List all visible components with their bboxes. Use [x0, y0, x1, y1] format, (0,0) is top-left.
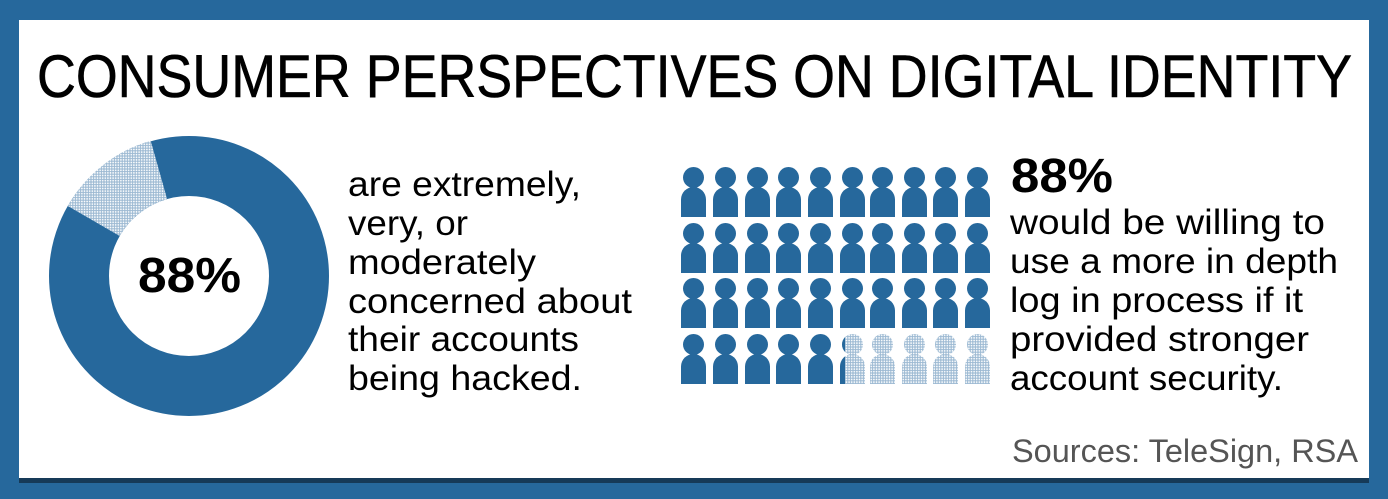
pictogram row 4	[681, 334, 990, 384]
text block: willingness to log in: provided stronger	[1010, 320, 1309, 359]
text block: willingness to log in: would be willing to	[1009, 203, 1325, 242]
text block: concern about hacked accounts: moderately	[348, 243, 537, 282]
sources note: Sources: TeleSign, RSA	[1012, 433, 1359, 469]
text block: willingness to log in	[1009, 203, 1338, 398]
stat heading: 88%: 88%	[1011, 150, 1113, 203]
donut centre value: 88%	[138, 249, 241, 303]
text block: concern about hacked accounts: concerned about	[348, 282, 632, 321]
text block: concern about hacked accounts: are extremely,	[348, 165, 581, 204]
text block: willingness to log in: account security.	[1010, 359, 1283, 398]
text block: willingness to log in: use a more in depth	[1010, 242, 1338, 281]
text block: concern about hacked accounts: very, or	[348, 204, 468, 243]
donut chart: 88%	[68, 141, 299, 386]
text block: concern about hacked accounts: their accounts	[348, 320, 579, 359]
text block: willingness to log in: log in process if it	[1010, 281, 1303, 320]
text block: concern about hacked accounts: being hacked.	[348, 359, 582, 398]
pictogram row 1	[681, 167, 990, 217]
pictogram row 2	[681, 223, 990, 273]
pictogram row 3	[681, 278, 990, 328]
text block: concern about hacked accounts	[348, 165, 632, 398]
pictogram: 100 people grid, 88% filled	[681, 167, 990, 384]
